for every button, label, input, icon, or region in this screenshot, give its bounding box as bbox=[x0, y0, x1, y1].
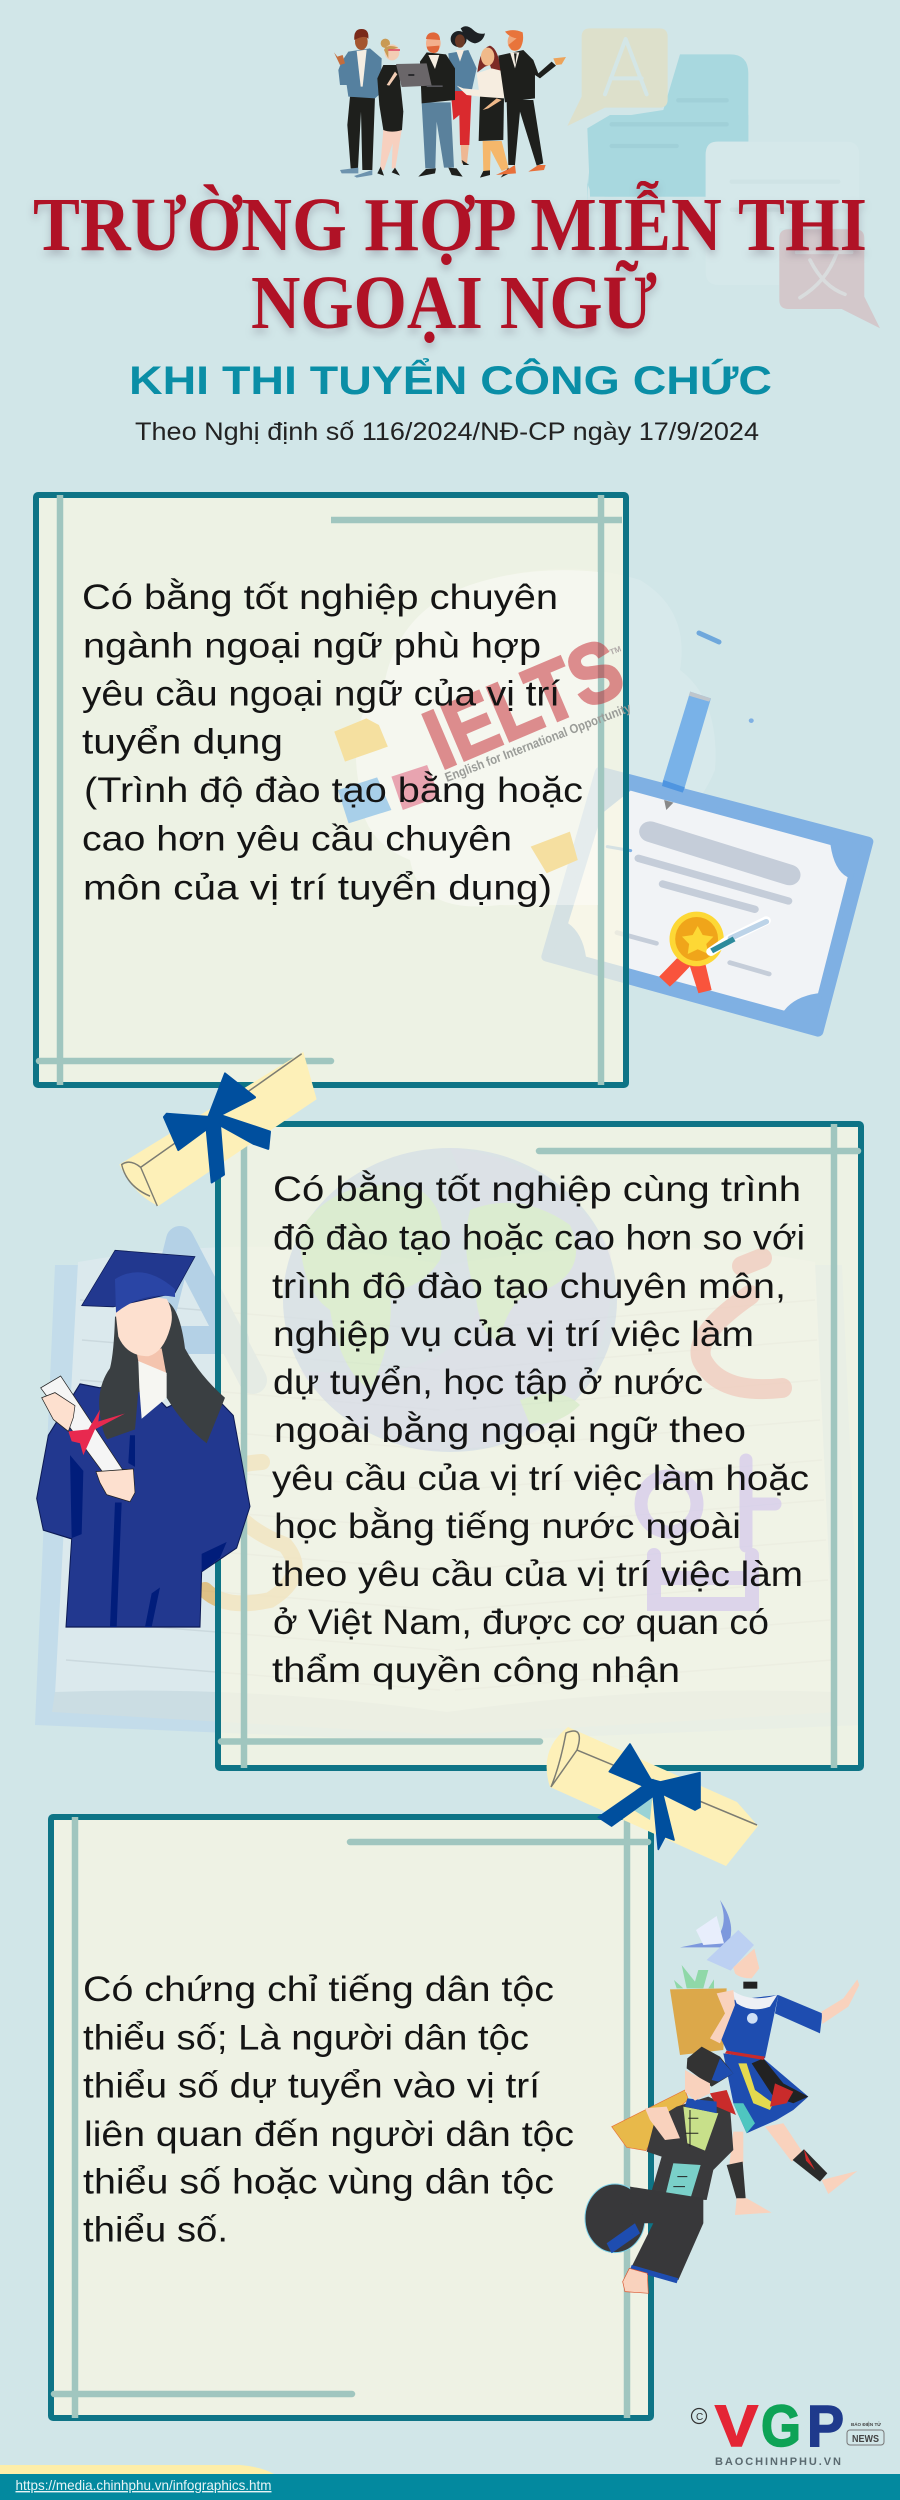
VGP logo bbox=[692, 2394, 884, 2468]
letter V: V bbox=[715, 2394, 758, 2459]
panel 2 text: thẩm quyền công nhận bbox=[272, 1651, 680, 1690]
horn bbox=[612, 2090, 688, 2151]
ribbon shadow bbox=[630, 1778, 654, 1820]
panel 2 text: ngoài bằng ngoại ngữ theo bbox=[274, 1411, 746, 1450]
gown shadows bbox=[70, 1435, 227, 1627]
letter G: G bbox=[761, 2394, 801, 2459]
vest bbox=[683, 2107, 718, 2151]
panel 3 text bbox=[83, 1970, 574, 2250]
panel 3 text: liên quan đến người dân tộc bbox=[84, 2115, 574, 2154]
blouse bbox=[720, 1995, 778, 2058]
panel inner lines bbox=[60, 495, 622, 1085]
legs bbox=[729, 2132, 743, 2165]
person: man with laptop bbox=[396, 32, 463, 177]
certificate text bars bbox=[617, 832, 789, 974]
panel 2 text: học bằng tiếng nước ngoài bbox=[274, 1507, 741, 1546]
basket with plants bbox=[674, 1965, 714, 1988]
panel 2 text: trình độ đào tạo chuyên môn, bbox=[272, 1267, 786, 1306]
person: man in black suit bbox=[496, 30, 566, 175]
panel 3 bbox=[51, 1817, 651, 2418]
hands bbox=[42, 1393, 135, 1502]
panel 1 text bbox=[82, 578, 583, 908]
scroll fold line bbox=[122, 1054, 302, 1206]
panel 1 text: (Trình độ đào tạo bằng hoặc bbox=[84, 771, 583, 810]
graduate illustration bbox=[37, 1250, 250, 1627]
mortarboard cap bbox=[82, 1250, 195, 1313]
icon: diploma scroll bbox=[547, 1727, 758, 1866]
translation speech bubbles bbox=[567, 28, 880, 328]
footer band bbox=[0, 2474, 900, 2500]
arms bbox=[822, 1979, 859, 2024]
open book background bbox=[35, 1148, 862, 1742]
letter A on book bbox=[145, 1240, 253, 1380]
body bbox=[647, 2097, 733, 2200]
panel 2 text: nghiệp vụ của vị trí việc làm bbox=[273, 1315, 754, 1354]
shirt collar bbox=[138, 1361, 167, 1419]
panel frame bbox=[36, 495, 626, 1085]
panel 3 text: thiểu số; Là người dân tộc bbox=[83, 2018, 529, 2058]
panel 1 text: ngành ngoại ngữ phù hợp bbox=[83, 626, 541, 666]
IELTS wordmark: IELTS bbox=[411, 620, 636, 787]
panel 2 text: độ đào tạo hoặc cao hơn so với bbox=[273, 1218, 805, 1258]
icon: blue bow bbox=[164, 1074, 270, 1182]
footer link: https://media.chinhphu.vn/infographics.htm bbox=[16, 2477, 272, 2493]
panel 3 text: thiểu số. bbox=[83, 2210, 228, 2250]
hat bbox=[687, 2047, 733, 2087]
cloud blob behind certificate bbox=[356, 569, 716, 910]
panel 1 bbox=[36, 495, 626, 1085]
icon: certificate frame bbox=[547, 772, 868, 1032]
icon: pencil bbox=[662, 692, 711, 810]
panel inner lines bbox=[244, 1124, 834, 1768]
panel 2 text: dự tuyển, học tập ở nước bbox=[273, 1363, 703, 1402]
panel 3 text: thiểu số hoặc vùng dân tộc bbox=[83, 2162, 554, 2202]
icon: diploma scroll bbox=[119, 1052, 317, 1206]
panel 2 text: yêu cầu của vị trí việc làm hoặc bbox=[272, 1459, 809, 1498]
panel frame bbox=[218, 1124, 861, 1768]
cloud blob inside panel bbox=[356, 570, 598, 907]
panel 2 text: theo yêu cầu của vị trí việc làm bbox=[272, 1555, 803, 1594]
person: woman with ponytail bbox=[448, 26, 485, 165]
page lines bbox=[66, 1300, 832, 1690]
diploma bbox=[41, 1376, 124, 1473]
IELTS logo with cloud and notes bbox=[334, 570, 636, 907]
icon: blue bow bbox=[598, 1744, 700, 1849]
legs bbox=[585, 2184, 645, 2253]
IELTS tagline: English for International Opportunity bbox=[443, 700, 634, 785]
hair bbox=[99, 1301, 225, 1443]
certificate illustration bbox=[547, 692, 868, 1032]
red ribbon bbox=[68, 1410, 125, 1455]
main title bbox=[33, 181, 867, 345]
red shawl bbox=[710, 2090, 736, 2115]
globe bbox=[283, 1148, 617, 1452]
scroll and bow 2 bbox=[547, 1727, 758, 1866]
face bbox=[685, 2070, 710, 2101]
decorative dash bbox=[699, 633, 719, 642]
icon: pen bbox=[711, 921, 766, 952]
panel 1 text: yêu cầu ngoại ngữ của vị trí bbox=[82, 674, 560, 714]
site name: BAOCHINHPHU.VN bbox=[715, 2456, 841, 2468]
news badge: BÁO ĐIỆN TỬ bbox=[851, 2420, 881, 2427]
panel 1 text: cao hơn yêu cầu chuyên bbox=[82, 820, 512, 858]
subtitle: KHI THI TUYỂN CÔNG CHỨC bbox=[129, 356, 772, 403]
title line 2: NGOẠI NGỮ bbox=[251, 260, 657, 345]
person: man in blue jacket bbox=[334, 29, 382, 178]
scroll fold line bbox=[551, 1731, 757, 1825]
foot bbox=[623, 2268, 648, 2293]
panel 1 text: tuyển dụng bbox=[82, 722, 283, 762]
news badge bbox=[847, 2420, 884, 2445]
person: woman in black dress bbox=[377, 39, 403, 176]
team of people illustration bbox=[334, 26, 566, 178]
man playing horn bbox=[585, 2047, 736, 2293]
panel 2 text bbox=[272, 1170, 809, 1690]
book page edge bbox=[52, 1691, 838, 1735]
scroll and bow 1 bbox=[119, 1052, 317, 1206]
woman with basket bbox=[670, 1900, 859, 2215]
panel 1 text: môn của vị trí tuyển dụng) bbox=[83, 868, 552, 908]
copyright mark bbox=[692, 2408, 706, 2424]
book pages bbox=[55, 1247, 835, 1712]
ethnic minority couple illustration bbox=[585, 1900, 859, 2293]
skirt bbox=[723, 2053, 808, 2133]
hand bbox=[645, 2107, 680, 2140]
panel inner lines bbox=[75, 1817, 627, 2418]
face and neck bbox=[137, 1348, 167, 1380]
panel 2 text: ở Việt Nam, được cơ quan có bbox=[273, 1603, 769, 1642]
face bbox=[733, 1949, 759, 1978]
footer accent curve bbox=[0, 2465, 274, 2474]
icon: certificate paper bbox=[568, 791, 848, 1011]
person: woman in white blouse bbox=[457, 46, 509, 178]
panel 2 bbox=[218, 1124, 861, 1768]
source line: Theo Nghị định số 116/2024/NĐ-CP ngày 17/9/2024 bbox=[135, 418, 759, 446]
panel 3 text: Có chứng chỉ tiếng dân tộc bbox=[83, 1970, 554, 2009]
book cover bbox=[35, 1265, 862, 1742]
trademark: TM bbox=[608, 644, 623, 657]
letter P: P bbox=[807, 2394, 844, 2459]
hangul and number letters bbox=[205, 1258, 782, 1604]
icon: medal bbox=[659, 912, 724, 993]
sticky notes bbox=[334, 718, 578, 873]
decorative dots bbox=[607, 718, 754, 851]
panel 1 text: Có bằng tốt nghiệp chuyên bbox=[82, 578, 558, 617]
gown bbox=[37, 1376, 250, 1627]
neck band bbox=[743, 1982, 757, 1989]
headdress bbox=[680, 1900, 731, 1947]
panel frame bbox=[51, 1817, 651, 2418]
panel 2 text: Có bằng tốt nghiệp cùng trình bbox=[273, 1170, 801, 1209]
panel 3 text: thiểu số dự tuyển vào vị trí bbox=[83, 2066, 540, 2106]
copyright mark: C bbox=[696, 2412, 703, 2423]
news badge: NEWS bbox=[852, 2434, 879, 2445]
